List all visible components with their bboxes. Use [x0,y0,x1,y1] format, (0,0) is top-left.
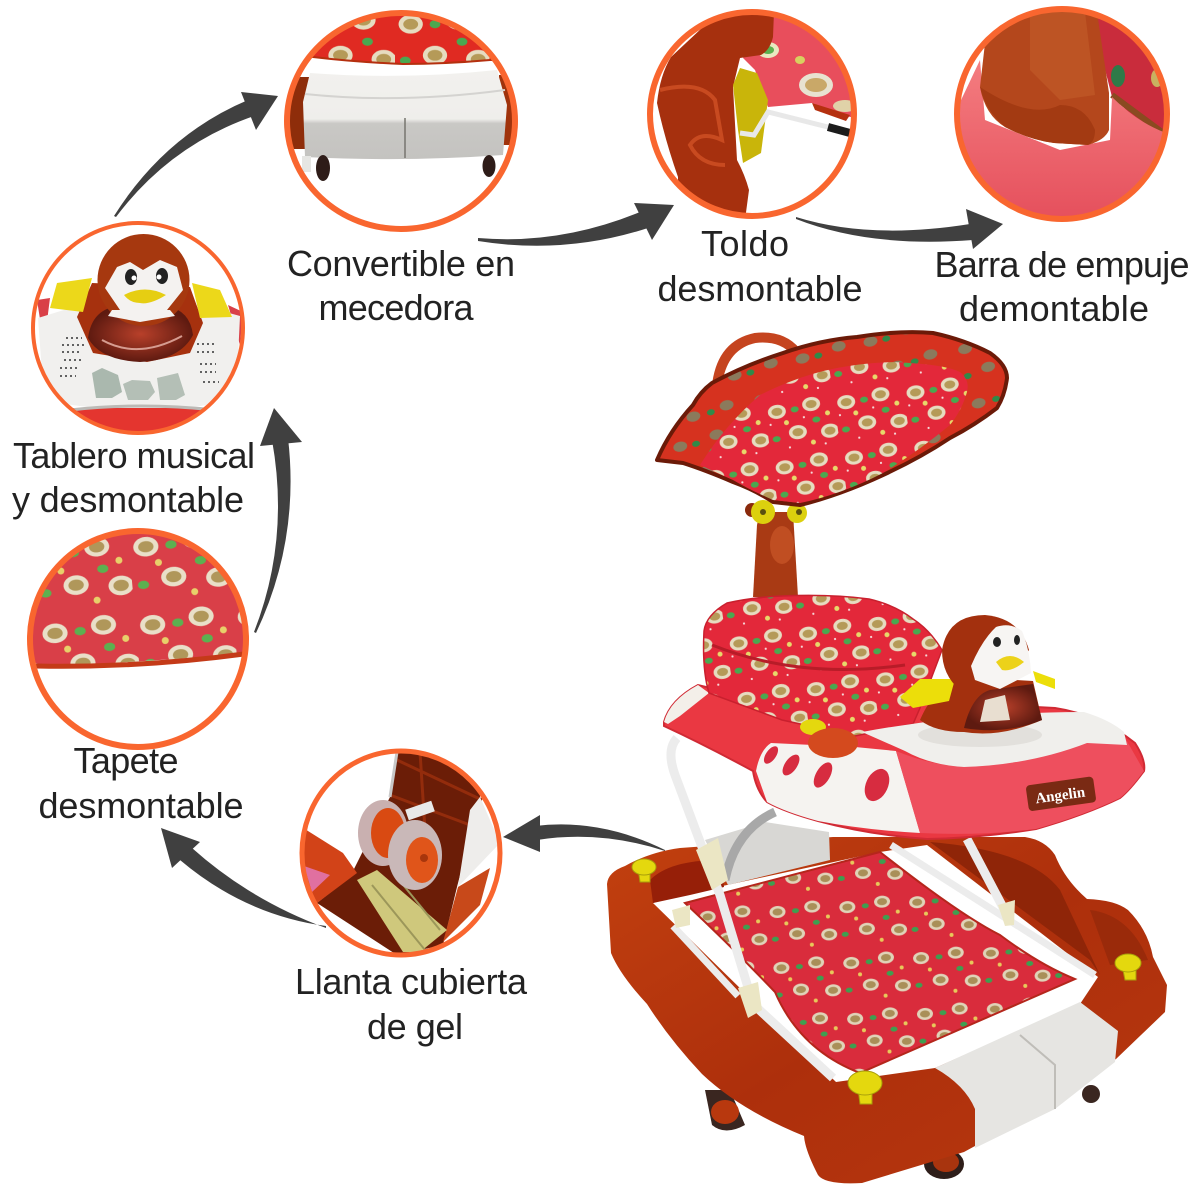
walker: small yellow toy [800,719,826,735]
arrow: tablero to convertible [114,92,278,217]
label: convertible en mecedora: Convertible en [287,243,515,284]
label: convertible en mecedora: mecedora [318,287,474,328]
arrow: tapete to tablero [254,408,302,633]
label: llanta cubierta de gel: de gel [367,1006,463,1047]
walker: interior opening [653,845,1098,1082]
label: tapete desmontable: desmontable [38,785,244,826]
circle: tapete desmontable [27,528,250,749]
walker: back bumper [705,822,830,885]
walker: white top deck [862,712,1127,767]
label: llanta cubierta de gel: Llanta cubierta [295,961,528,1002]
walker: canopy clamps [751,500,807,524]
walker: red ovals [761,744,894,805]
walker: front bumper [935,1002,1118,1148]
walker: wheels [705,1085,1100,1179]
walker: coral front section [896,732,1144,834]
circle: barra de empuje [954,9,1172,222]
arrow: llanta to tapete [161,828,326,928]
label: tablero musical y desmontable: y desmontable [12,479,244,520]
label: barra de empuje demontable: demontable [959,288,1149,329]
arrow: toldo to barra [796,209,1003,249]
circle: convertible en mecedora [285,5,519,230]
walker: collars [672,838,1015,1018]
walker: penguin toy [900,615,1055,747]
speaker dots left [60,338,84,376]
walker: left trim [664,685,709,724]
label: tapete desmontable: Tapete [74,740,178,781]
walker: floor mat [685,852,1075,1073]
walker: brand badge: Angelin [1034,784,1087,807]
circle: toldo desmontable [648,10,860,220]
arrow: convertible to toldo [478,203,674,246]
speaker dots right [197,344,219,382]
label: toldo desmontable: Toldo [701,223,789,264]
walker: brand badge [1026,776,1096,811]
arrow: walker to llanta [503,815,665,852]
walker: rails [673,845,1095,996]
product: baby walker [607,332,1167,1183]
walker: rattle ball [808,728,858,758]
label: barra de empuje demontable: Barra de empuje [934,244,1190,285]
walker: white front section [756,743,920,833]
walker: tray base [664,685,1144,839]
walker: pole [745,503,798,597]
walker: handle [717,338,796,385]
circle: tablero musical [32,219,246,440]
walker: canopy [657,332,1007,505]
walker: base [607,837,1167,1183]
circle: llanta cubierta de gel [300,750,502,958]
walker: yellow knobs [632,859,1141,1104]
label: tablero musical y desmontable: Tablero musical [13,435,255,476]
walker: white tubes [671,738,1007,1078]
walker: seat [704,595,942,736]
label: toldo desmontable: desmontable [658,268,862,309]
